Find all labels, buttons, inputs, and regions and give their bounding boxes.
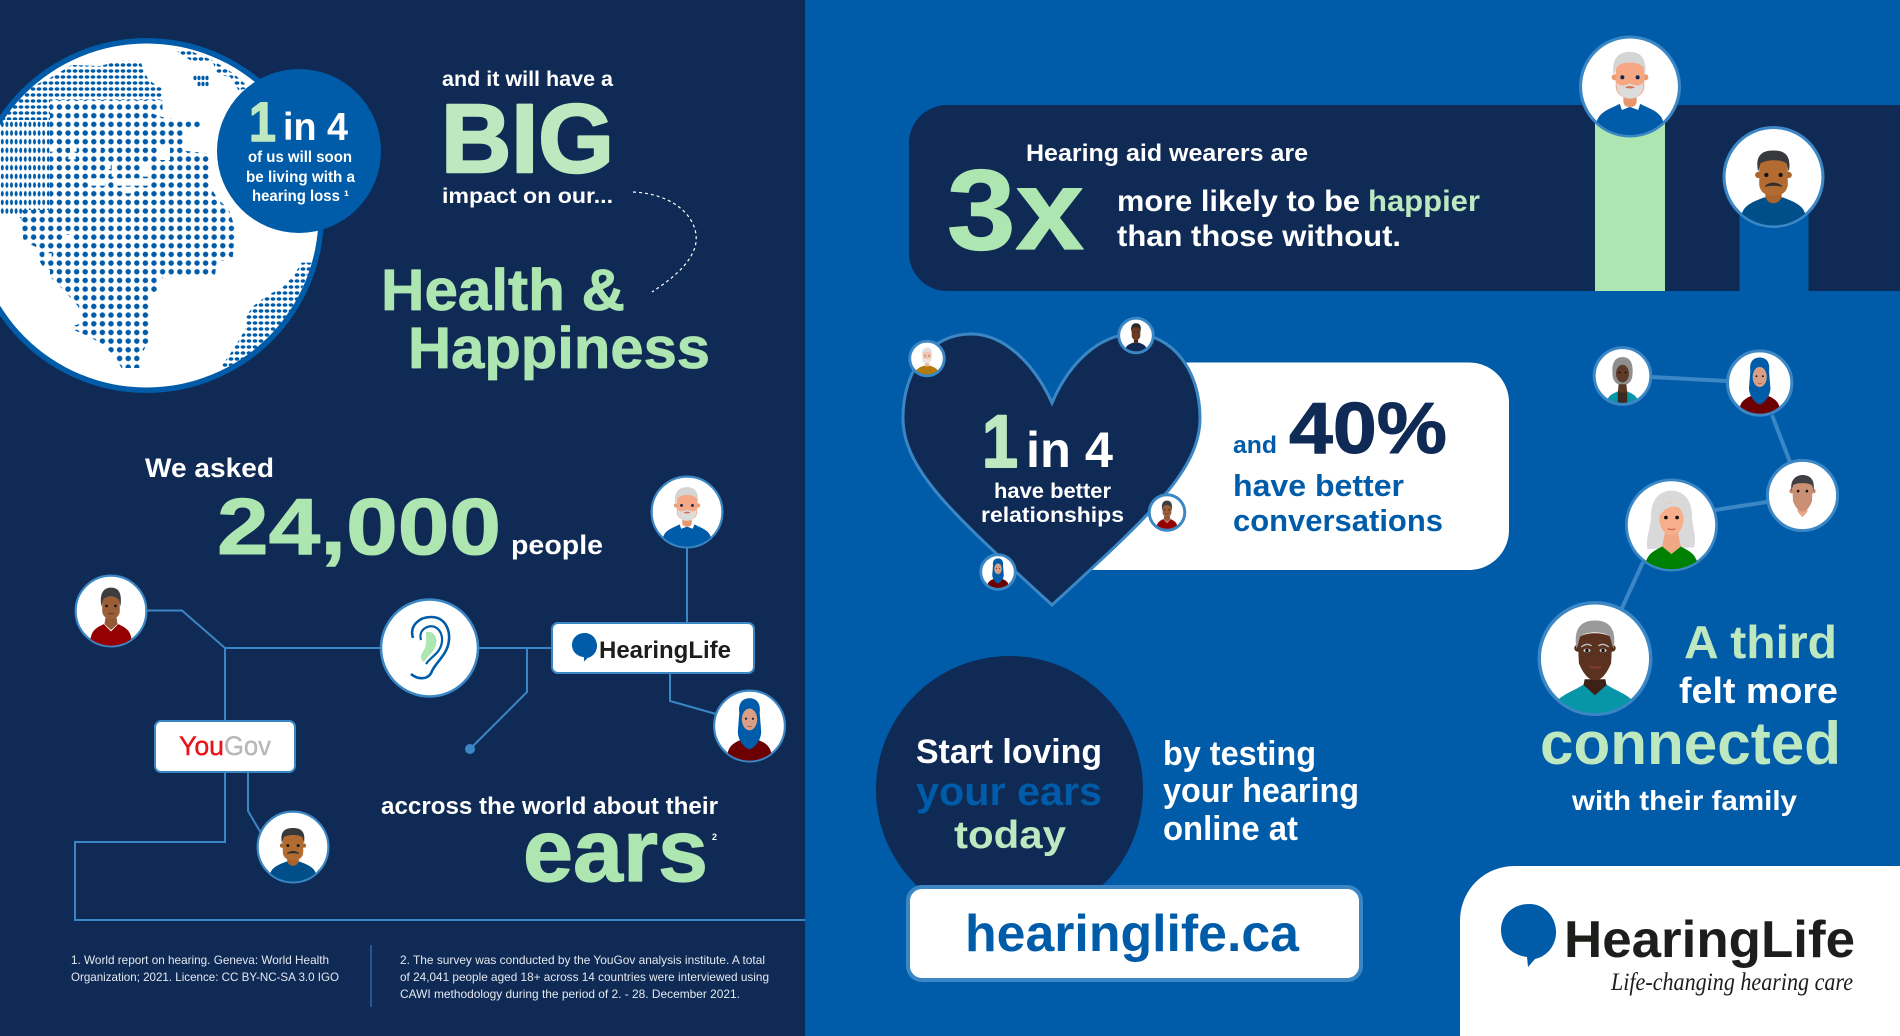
avatar: older dark man bbox=[1539, 603, 1651, 728]
avatar: heart dark man bbox=[1119, 318, 1153, 357]
badge: 1 in 4 bbox=[217, 69, 381, 233]
text: more likely to be happier: happier bbox=[1368, 185, 1480, 218]
URL box bbox=[908, 887, 1361, 980]
avatar: older man bbox=[652, 477, 722, 556]
text: a third felt more connected: connected bbox=[1540, 710, 1841, 777]
connection lines bbox=[1622, 377, 1790, 608]
dashed arrow bbox=[633, 192, 696, 292]
text: by testing your hearing: online at bbox=[1163, 810, 1298, 848]
avatar: woman red top bbox=[76, 576, 146, 655]
URL box: hearinglife.ca bbox=[965, 905, 1300, 963]
text: start loving your ears today bbox=[916, 733, 1102, 857]
logo panel: Life-changing hearing care bbox=[1610, 969, 1853, 996]
footnote 2 bbox=[400, 953, 769, 1001]
panel: 40% conversations bbox=[1070, 362, 1509, 570]
stat: 1 in 4 relationships bbox=[981, 400, 1124, 527]
heading: Health & Happiness: Health & bbox=[381, 258, 625, 323]
avatar: man on blue bar bbox=[1724, 128, 1823, 238]
number: 3x: 3x bbox=[947, 147, 1084, 274]
network lines bbox=[75, 548, 805, 920]
badge: 1 in 4: hearing loss ¹ bbox=[252, 188, 349, 205]
network end dot bbox=[465, 744, 475, 754]
heading: BIG: BIG bbox=[441, 84, 614, 193]
logo box: YouGov: Gov bbox=[224, 731, 271, 761]
avatar: heart hijab woman bbox=[981, 555, 1015, 594]
stat: 40% conversations: 40% bbox=[1289, 389, 1447, 469]
panel: left background bbox=[0, 0, 805, 1036]
avatar: hijab woman network bbox=[1727, 351, 1792, 423]
footnote 2: of 24,041 people aged 18+ across 14 countries were interviewed using bbox=[400, 970, 769, 984]
text: a third felt more connected: A third bbox=[1684, 616, 1837, 668]
text: impact on our: impact on our... bbox=[442, 185, 613, 208]
text: accross the world: accross the world about their bbox=[381, 793, 718, 820]
heading: ears: ears bbox=[523, 801, 708, 900]
stat: 1 in 4 relationships: have better bbox=[994, 480, 1111, 503]
text: by testing your hearing: by testing bbox=[1163, 735, 1316, 773]
text: hearing aid wearers: Hearing aid wearers are bbox=[1026, 140, 1308, 167]
text: more likely to be happier: more likely to be bbox=[1117, 185, 1360, 218]
globe bbox=[0, 30, 324, 400]
stat: 1 in 4 relationships: relationships bbox=[981, 504, 1124, 527]
panel: right background bbox=[805, 0, 1900, 1036]
text: by testing your hearing: your hearing bbox=[1163, 772, 1359, 810]
avatar: man network bbox=[1767, 460, 1838, 531]
stat: 1 in 4 relationships: 1 bbox=[982, 400, 1018, 483]
heading: Health & Happiness bbox=[381, 258, 710, 381]
text: start loving your ears today: your ears bbox=[916, 770, 1102, 814]
avatar: white haired woman bbox=[1626, 480, 1717, 581]
stat: 40% conversations: have better bbox=[1233, 468, 1404, 503]
badge: 1 in 4: in 4 bbox=[283, 106, 348, 149]
badge: 1 in 4: be living with a bbox=[246, 169, 355, 186]
number: 24,000: 24,000 bbox=[217, 482, 501, 571]
avatar: heart ochre man bbox=[910, 341, 944, 380]
text: by testing your hearing bbox=[1163, 735, 1359, 848]
logo panel: HearingLife bbox=[1564, 911, 1855, 969]
stat: 1 in 4 relationships: in 4 bbox=[1026, 422, 1113, 478]
icon: ear bbox=[381, 600, 478, 696]
avatar: older man on green bar bbox=[1581, 37, 1679, 148]
logo box: HearingLife bbox=[552, 623, 754, 673]
logo box: YouGov bbox=[155, 721, 295, 772]
footnote 1: 1. World report on hearing. Geneva: World Health bbox=[71, 953, 329, 967]
avatar: woman in hijab bbox=[714, 691, 785, 770]
heading: Health & Happiness: Happiness bbox=[408, 316, 710, 381]
avatar: man with moustache bbox=[258, 812, 328, 891]
text: start loving your ears today: today bbox=[954, 814, 1066, 857]
CTA circle bbox=[876, 656, 1143, 923]
logo box: HearingLife: HearingLife bbox=[599, 637, 731, 664]
stat: 40% conversations: conversations bbox=[1233, 503, 1443, 538]
heart bbox=[903, 334, 1200, 605]
text: a third felt more connected bbox=[1540, 616, 1841, 816]
text: a third felt more connected: with their family bbox=[1571, 785, 1797, 816]
panel: 3x happier bar bbox=[909, 105, 1900, 291]
text: people: people bbox=[511, 530, 603, 560]
text: start loving your ears today: Start loving bbox=[916, 733, 1102, 771]
stat: 40% conversations: and bbox=[1233, 432, 1277, 459]
footnote mark: 2 bbox=[712, 832, 717, 842]
footnote 2: CAWI methodology during the period of 2. - 28. December 2021. bbox=[400, 987, 740, 1001]
badge: 1 in 4: of us will soon bbox=[248, 149, 352, 166]
text: We asked: We asked bbox=[145, 453, 274, 483]
footnote 2: 2. The survey was conducted by the YouGov analysis institute. A total bbox=[400, 953, 765, 967]
avatar: heart red woman bbox=[1149, 495, 1185, 535]
footnote 1: Organization; 2021. Licence: CC BY-NC-SA 3.0 IGO bbox=[71, 970, 339, 984]
avatar: gray haired woman bbox=[1594, 347, 1651, 411]
logo panel bbox=[1460, 866, 1900, 1036]
text: than those without: than those without. bbox=[1117, 220, 1401, 253]
stat: 40% conversations bbox=[1233, 389, 1447, 538]
badge: 1 in 4: 1 bbox=[249, 90, 276, 153]
text: a third felt more connected: felt more bbox=[1679, 670, 1838, 711]
text: more likely to be happier bbox=[1117, 185, 1480, 218]
footnote 1 bbox=[71, 953, 339, 984]
text: and it will have a: and it will have a bbox=[442, 68, 613, 91]
logo box: YouGov: You bbox=[179, 731, 224, 761]
